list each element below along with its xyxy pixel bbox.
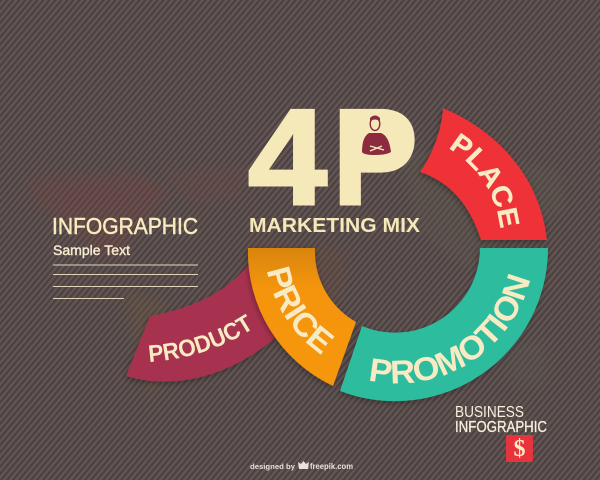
heading: INFOGRAPHIC block: [52, 213, 198, 299]
text lines placeholder: [53, 264, 198, 299]
subtitle: marketing mix: MARKETING MIX: [249, 215, 421, 237]
faint world map: [25, 150, 565, 400]
text: business: BUSINESS: [455, 404, 524, 421]
footer credit: [250, 461, 353, 471]
segment: place: [420, 108, 547, 244]
segment: price: [245, 248, 356, 388]
title: 4P: P: [333, 81, 418, 233]
segment: place: PLACE: [450, 132, 520, 228]
title: 4P: [248, 81, 418, 233]
badge: business infographic: [455, 404, 547, 462]
text: sample text: Sample Text: [53, 242, 130, 258]
text: infographic: INFOGRAPHIC: [455, 419, 547, 436]
icon: dollar: $: [514, 436, 526, 462]
title: 4P: 4: [248, 81, 327, 233]
footer credit: freepik.com: [310, 462, 353, 471]
segment: promotion: [339, 248, 548, 404]
footer credit: designed by: [250, 462, 296, 471]
segment: product: PRODUCT: [149, 314, 250, 362]
heading: infographic: INFOGRAPHIC: [52, 213, 198, 239]
icon: businessman: [362, 116, 391, 155]
segment: product: [126, 264, 275, 385]
segment: promotion: PROMOTION: [370, 274, 530, 384]
segment: price: PRICE: [267, 266, 334, 355]
